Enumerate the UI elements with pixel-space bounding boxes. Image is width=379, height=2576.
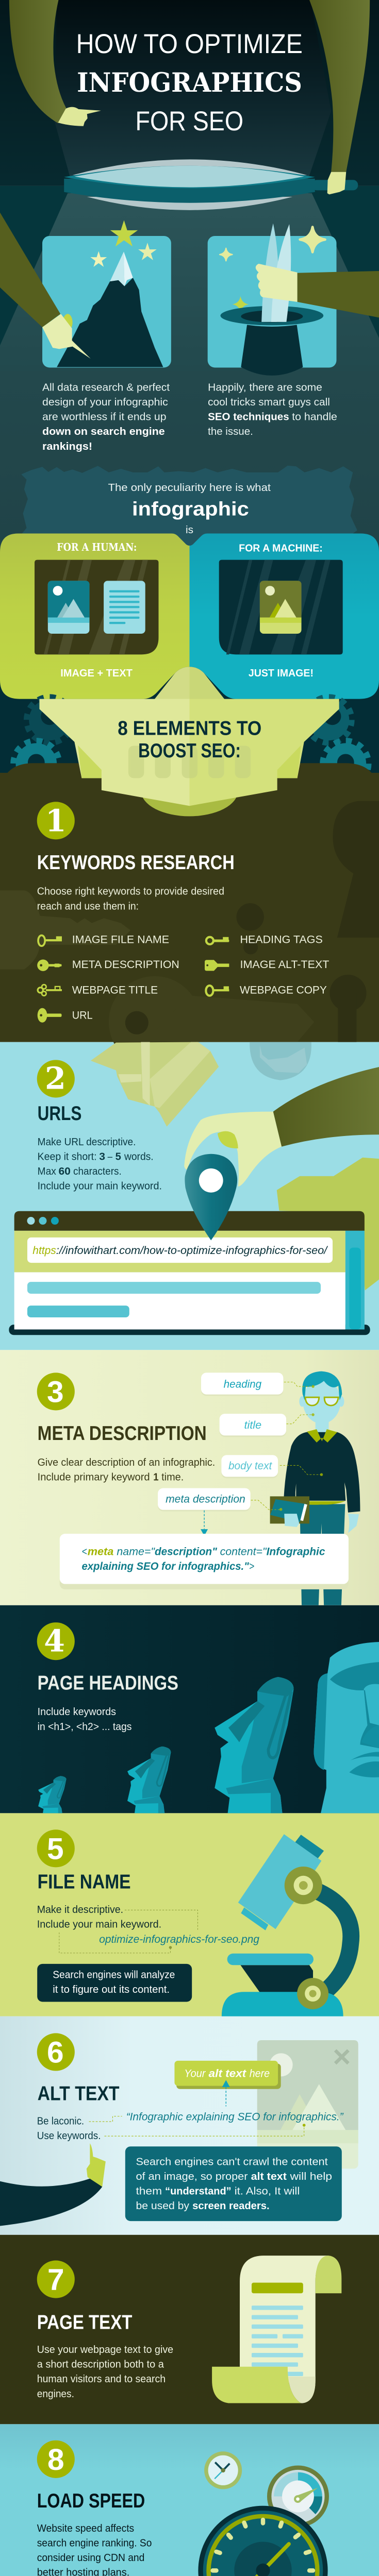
url text: ://infowithart.com/how-to-optimize-infographics-for-seo/ (56, 1244, 328, 1257)
icon: key 4 (38, 1008, 62, 1023)
body text: Include your main keyword. (37, 1919, 161, 1930)
body text: Include keywords (38, 1706, 116, 1718)
alt text tooltip: alt text (209, 2066, 246, 2079)
body text: consider using CDN and (37, 2552, 144, 2564)
body text (38, 1136, 162, 1192)
number badge 4: 4 (44, 1623, 65, 1658)
panel: for a human: FOR A HUMAN: (57, 541, 137, 553)
explanation box: of an image, so proper (136, 2171, 248, 2182)
body text (37, 1904, 161, 1930)
bubble: meta description (158, 1488, 251, 1511)
explanation box: it. Also, It will (235, 2185, 300, 2197)
body text: – (108, 1150, 112, 1162)
heading: PAGE TEXT (37, 2311, 132, 2334)
alt text example: “Infographic explaining SEO for infographics.” (126, 2110, 343, 2123)
icon: large speedometer (198, 2506, 328, 2576)
body text: 5 (116, 1150, 121, 1162)
section 1: keywords research (0, 801, 379, 1068)
torn paper panel (21, 466, 357, 550)
example file name: optimize-infographics-for-seo.png (99, 1933, 259, 1945)
number badge 2 (37, 1060, 75, 1097)
icon: image card (48, 581, 89, 634)
heading: FILE NAME (38, 1871, 131, 1893)
body text: reach and use them in: (37, 900, 139, 912)
arm: top right holding magnifier (309, 0, 370, 172)
body text (37, 886, 224, 912)
body text: 1 (153, 1471, 159, 1483)
code callout: > (249, 1560, 254, 1572)
number badge 3: 3 (47, 1376, 64, 1409)
number badge 4 (37, 1622, 75, 1660)
body text: words. (124, 1150, 154, 1162)
intro and comparison band (0, 381, 379, 830)
body text: human visitors and to search (37, 2373, 166, 2385)
character (270, 1371, 360, 1605)
bubble: heading: heading (224, 1377, 261, 1390)
number badge 7: 7 (47, 2263, 64, 2297)
alt text tooltip: here (250, 2066, 270, 2079)
browser window (9, 1211, 370, 1335)
decorative map and globe (91, 1042, 379, 1291)
section 7: page text (37, 2256, 341, 2576)
section 5: file name (0, 1829, 358, 2226)
panel: for a machine: JUST IMAGE! (249, 667, 314, 679)
panel: for a human (0, 533, 190, 699)
body text: search engine ranking. So (37, 2537, 152, 2549)
body text: Include your main keyword. (38, 1180, 162, 1192)
bubble: title: title (244, 1418, 261, 1431)
number badge 7 (37, 2261, 75, 2298)
intro text left: design of your infographic (42, 396, 168, 408)
explanation box: alt text (251, 2171, 287, 2182)
number badge 2: 2 (45, 1061, 66, 1096)
explanation box: be used by (136, 2200, 190, 2212)
paper scroll (212, 2256, 341, 2403)
keyword list: IMAGE FILE NAME (72, 933, 169, 945)
peculiarity text: is (186, 524, 193, 536)
body text: Be laconic. (37, 2115, 84, 2127)
icon: small gauge (267, 2465, 329, 2527)
peculiarity text: The only peculiarity here is what (108, 482, 271, 494)
body text: engines. (37, 2388, 74, 2400)
title (76, 29, 303, 137)
callout lines (89, 2116, 304, 2136)
explanation box: will help (289, 2171, 332, 2182)
icon: key 1 (38, 935, 62, 946)
heading: PAGE HEADINGS (38, 1671, 178, 1694)
explanation box: “understand” (165, 2185, 232, 2197)
image placeholder (257, 2040, 358, 2168)
code callout: explaining SEO for infographics." (81, 1560, 250, 1572)
body text: Max (38, 1165, 56, 1177)
hero illustration (0, 0, 379, 376)
body text: Give clear description of an infographic. (38, 1456, 215, 1468)
panel: for a human: IMAGE + TEXT (60, 667, 133, 679)
number badge 1 (37, 802, 75, 839)
arm: top left pointing (9, 0, 101, 126)
panel: for a machine (190, 533, 379, 699)
callout box: it to figure out its content. (53, 1984, 170, 1995)
arrow (222, 2080, 230, 2106)
keyword list: WEBPAGE COPY (240, 983, 327, 996)
moai: small (127, 1747, 171, 1813)
intro text right: SEO techniques (208, 411, 289, 423)
heading: META DESCRIPTION (38, 1422, 207, 1445)
gears (14, 698, 368, 786)
body text: 3 (99, 1150, 105, 1162)
body text: Website speed affects (37, 2522, 134, 2534)
callout box (37, 1964, 192, 2002)
icon: key 6 (205, 960, 229, 971)
code callout (60, 1534, 349, 1589)
body text: Choose right keywords to provide desired (37, 886, 224, 897)
number badge 5: 5 (47, 1832, 64, 1866)
intro text left: down on search engine (42, 426, 165, 437)
body text: 60 (58, 1165, 71, 1177)
intro text right: to handle (292, 411, 337, 423)
keyword list: HEADING TAGS (240, 933, 323, 945)
intro text left: All data research & perfect (42, 381, 170, 393)
bubble: heading (201, 1372, 283, 1396)
arm pointing up (0, 2143, 106, 2226)
icon: image only (260, 581, 302, 634)
arm with pin (184, 1067, 379, 1187)
explanation box: them (136, 2185, 162, 2197)
icon: key 3 (38, 985, 62, 996)
background keyholes and keys (0, 801, 379, 1068)
number badge 6 (37, 2033, 75, 2071)
icon: location pin (185, 1154, 237, 1241)
code callout: meta (88, 1545, 113, 1557)
body text: Make it descriptive. (37, 1904, 123, 1916)
callout box: Search engines will analyze (53, 1969, 175, 1981)
heading: ALT TEXT (38, 2082, 120, 2105)
code callout: < (81, 1545, 87, 1557)
title: INFOGRAPHICS (77, 67, 302, 98)
intro text left: are worthless if it ends up (42, 411, 167, 423)
body text: Use keywords. (37, 2130, 101, 2142)
code callout: description" (155, 1545, 218, 1557)
keyword list (37, 933, 329, 1023)
code callout: name=" (117, 1545, 155, 1557)
alt text tooltip: Your (184, 2066, 206, 2079)
number badge 1: 1 (45, 803, 67, 838)
panel: for a machine: FOR A MACHINE: (239, 543, 323, 554)
body text: Use your webpage text to give (37, 2344, 173, 2355)
keyword list: WEBPAGE TITLE (72, 983, 158, 996)
alt text tooltip (174, 2061, 281, 2089)
banner: 8 elements: BOOST SEO: (138, 739, 241, 762)
section 1 panel top (0, 763, 379, 830)
body text (37, 2115, 101, 2142)
keyword list: URL (72, 1009, 93, 1022)
code callout: Infographic (267, 1545, 325, 1557)
keyword list: IMAGE ALT-TEXT (240, 958, 329, 971)
banner: 8 elements: 8 ELEMENTS TO (118, 717, 261, 739)
explanation box: Search engines can't crawl the content (136, 2156, 328, 2167)
body text (37, 2522, 152, 2576)
callout lines (59, 1910, 197, 1953)
intro text left (42, 381, 170, 452)
heading: URLS (38, 1102, 81, 1125)
bubble: body text: body text (228, 1459, 272, 1472)
body text: a short description both to a (37, 2359, 164, 2370)
peculiarity text (108, 482, 271, 536)
number badge 3 (37, 1372, 75, 1411)
icon: key 2 (37, 959, 62, 971)
bubble: body text (221, 1455, 278, 1478)
url text: https (32, 1244, 56, 1257)
body text (37, 2344, 173, 2400)
intro text right: cool tricks smart guys call (208, 396, 330, 408)
body text (38, 1456, 215, 1483)
body text: Include primary keyword (38, 1471, 150, 1483)
title: HOW TO OPTIMIZE (76, 29, 303, 59)
body text: characters. (73, 1165, 122, 1177)
arrow (201, 1511, 208, 1536)
book (270, 1496, 309, 1523)
knob under banner (141, 766, 238, 816)
banner: 8 elements (39, 667, 339, 806)
icon: key 5 (206, 937, 229, 944)
number badge 8: 8 (47, 2443, 64, 2477)
section 6: alt text (0, 2033, 358, 2226)
bubble: title (220, 1414, 286, 1437)
code callout: content=" (220, 1545, 267, 1557)
moai: tiny (38, 1776, 66, 1813)
section 3: meta description (37, 1371, 360, 1605)
section 4: page headings (37, 1622, 379, 1813)
callout lines (251, 1382, 321, 1510)
intro text right: the issue. (208, 426, 253, 437)
icon: key 7 (206, 986, 229, 996)
intro text right: Happily, there are some (208, 381, 322, 393)
number badge 8 (37, 2441, 75, 2478)
body text: in <h1>, <h2> ... tags (38, 1721, 131, 1733)
peculiarity text: infographic (132, 498, 249, 520)
body text: time. (161, 1471, 184, 1483)
heading: KEYWORDS RESEARCH (37, 851, 235, 874)
body text (38, 1706, 131, 1733)
panel: magic hat image (208, 224, 379, 376)
moai: large (314, 1642, 379, 1813)
panel: mountain image (42, 221, 171, 367)
title: FOR SEO (135, 106, 243, 137)
explanation box (125, 2146, 342, 2221)
icon: clock (204, 2451, 242, 2489)
explanation box: screen readers. (192, 2200, 270, 2212)
arm: lower left pointing down (0, 212, 91, 359)
body text: Keep it short: (38, 1150, 97, 1162)
bubble: meta description: meta description (166, 1493, 245, 1505)
number badge 6: 6 (47, 2036, 64, 2070)
body text: Make URL descriptive. (38, 1136, 136, 1148)
keyword list: META DESCRIPTION (72, 958, 179, 971)
intro text right (208, 381, 337, 437)
icon: text document (104, 581, 145, 634)
section 2: urls (9, 1042, 379, 1335)
number badge 5 (37, 1829, 75, 1867)
moai: medium (215, 1677, 294, 1813)
heading: LOAD SPEED (37, 2489, 145, 2512)
microscope (222, 1834, 351, 2016)
intro text left: rankings! (42, 440, 92, 452)
magnifying glass (64, 159, 358, 210)
